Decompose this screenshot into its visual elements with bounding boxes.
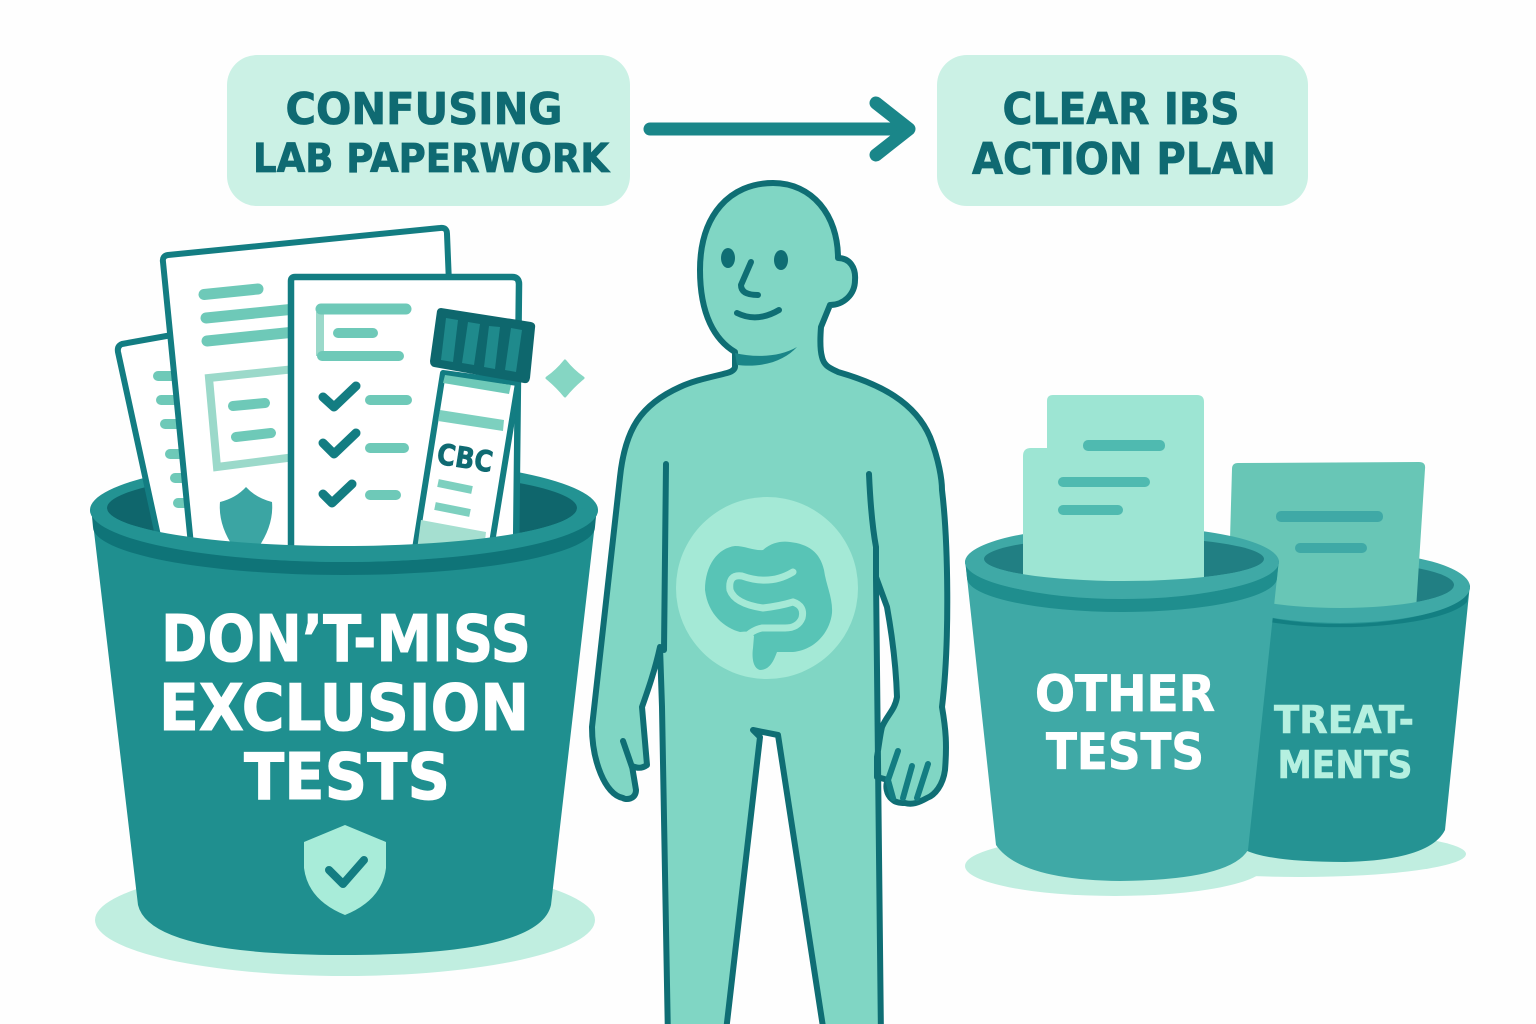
label: treatments: TREAT- [1274,698,1414,742]
box: clear IBS action plan: CLEAR IBS [1002,84,1240,135]
person [592,183,947,1024]
chin shadow [735,347,797,366]
label: treatments: MENTS [1278,743,1412,787]
label: other tests [1035,665,1215,781]
label: other tests: TESTS [1046,723,1204,781]
sparkle [547,361,583,396]
large bucket front [90,506,598,955]
label: other tests: OTHER [1035,665,1215,723]
inner arm lines [623,464,876,767]
face [721,248,788,317]
paper: large report sheet [163,228,460,555]
small bucket shadows [965,831,1466,896]
bucket label: DON’T-MISS [161,603,531,677]
box: clear IBS action plan: ACTION PLAN [972,134,1276,185]
large bucket shadow [95,864,595,976]
bucket label: TESTS [244,741,450,815]
arrow [650,103,909,155]
icon: shield check [304,825,386,915]
papers: other tests [1023,395,1204,590]
paper: small back sheet [118,335,215,545]
box: confusing lab paperwork: LAB PAPERWORK [253,136,611,182]
box: confusing lab paperwork [227,55,630,206]
label: treatments [1274,698,1414,787]
gut circle [676,497,858,679]
bucket label [159,603,531,815]
bucket label: EXCLUSION [159,672,529,746]
bucket: other tests [965,395,1279,881]
test tube labelled CBC: CBC [435,437,495,479]
box: clear IBS action plan [937,55,1308,206]
test tube labelled CBC [414,308,535,555]
bucket: treatments [1210,462,1470,862]
box: confusing lab paperwork: CONFUSING [286,84,562,135]
paper: treatments [1228,462,1425,610]
paper: checklist sheet [291,277,519,555]
icon: intestines [705,542,832,670]
large bucket back rim [90,458,598,562]
